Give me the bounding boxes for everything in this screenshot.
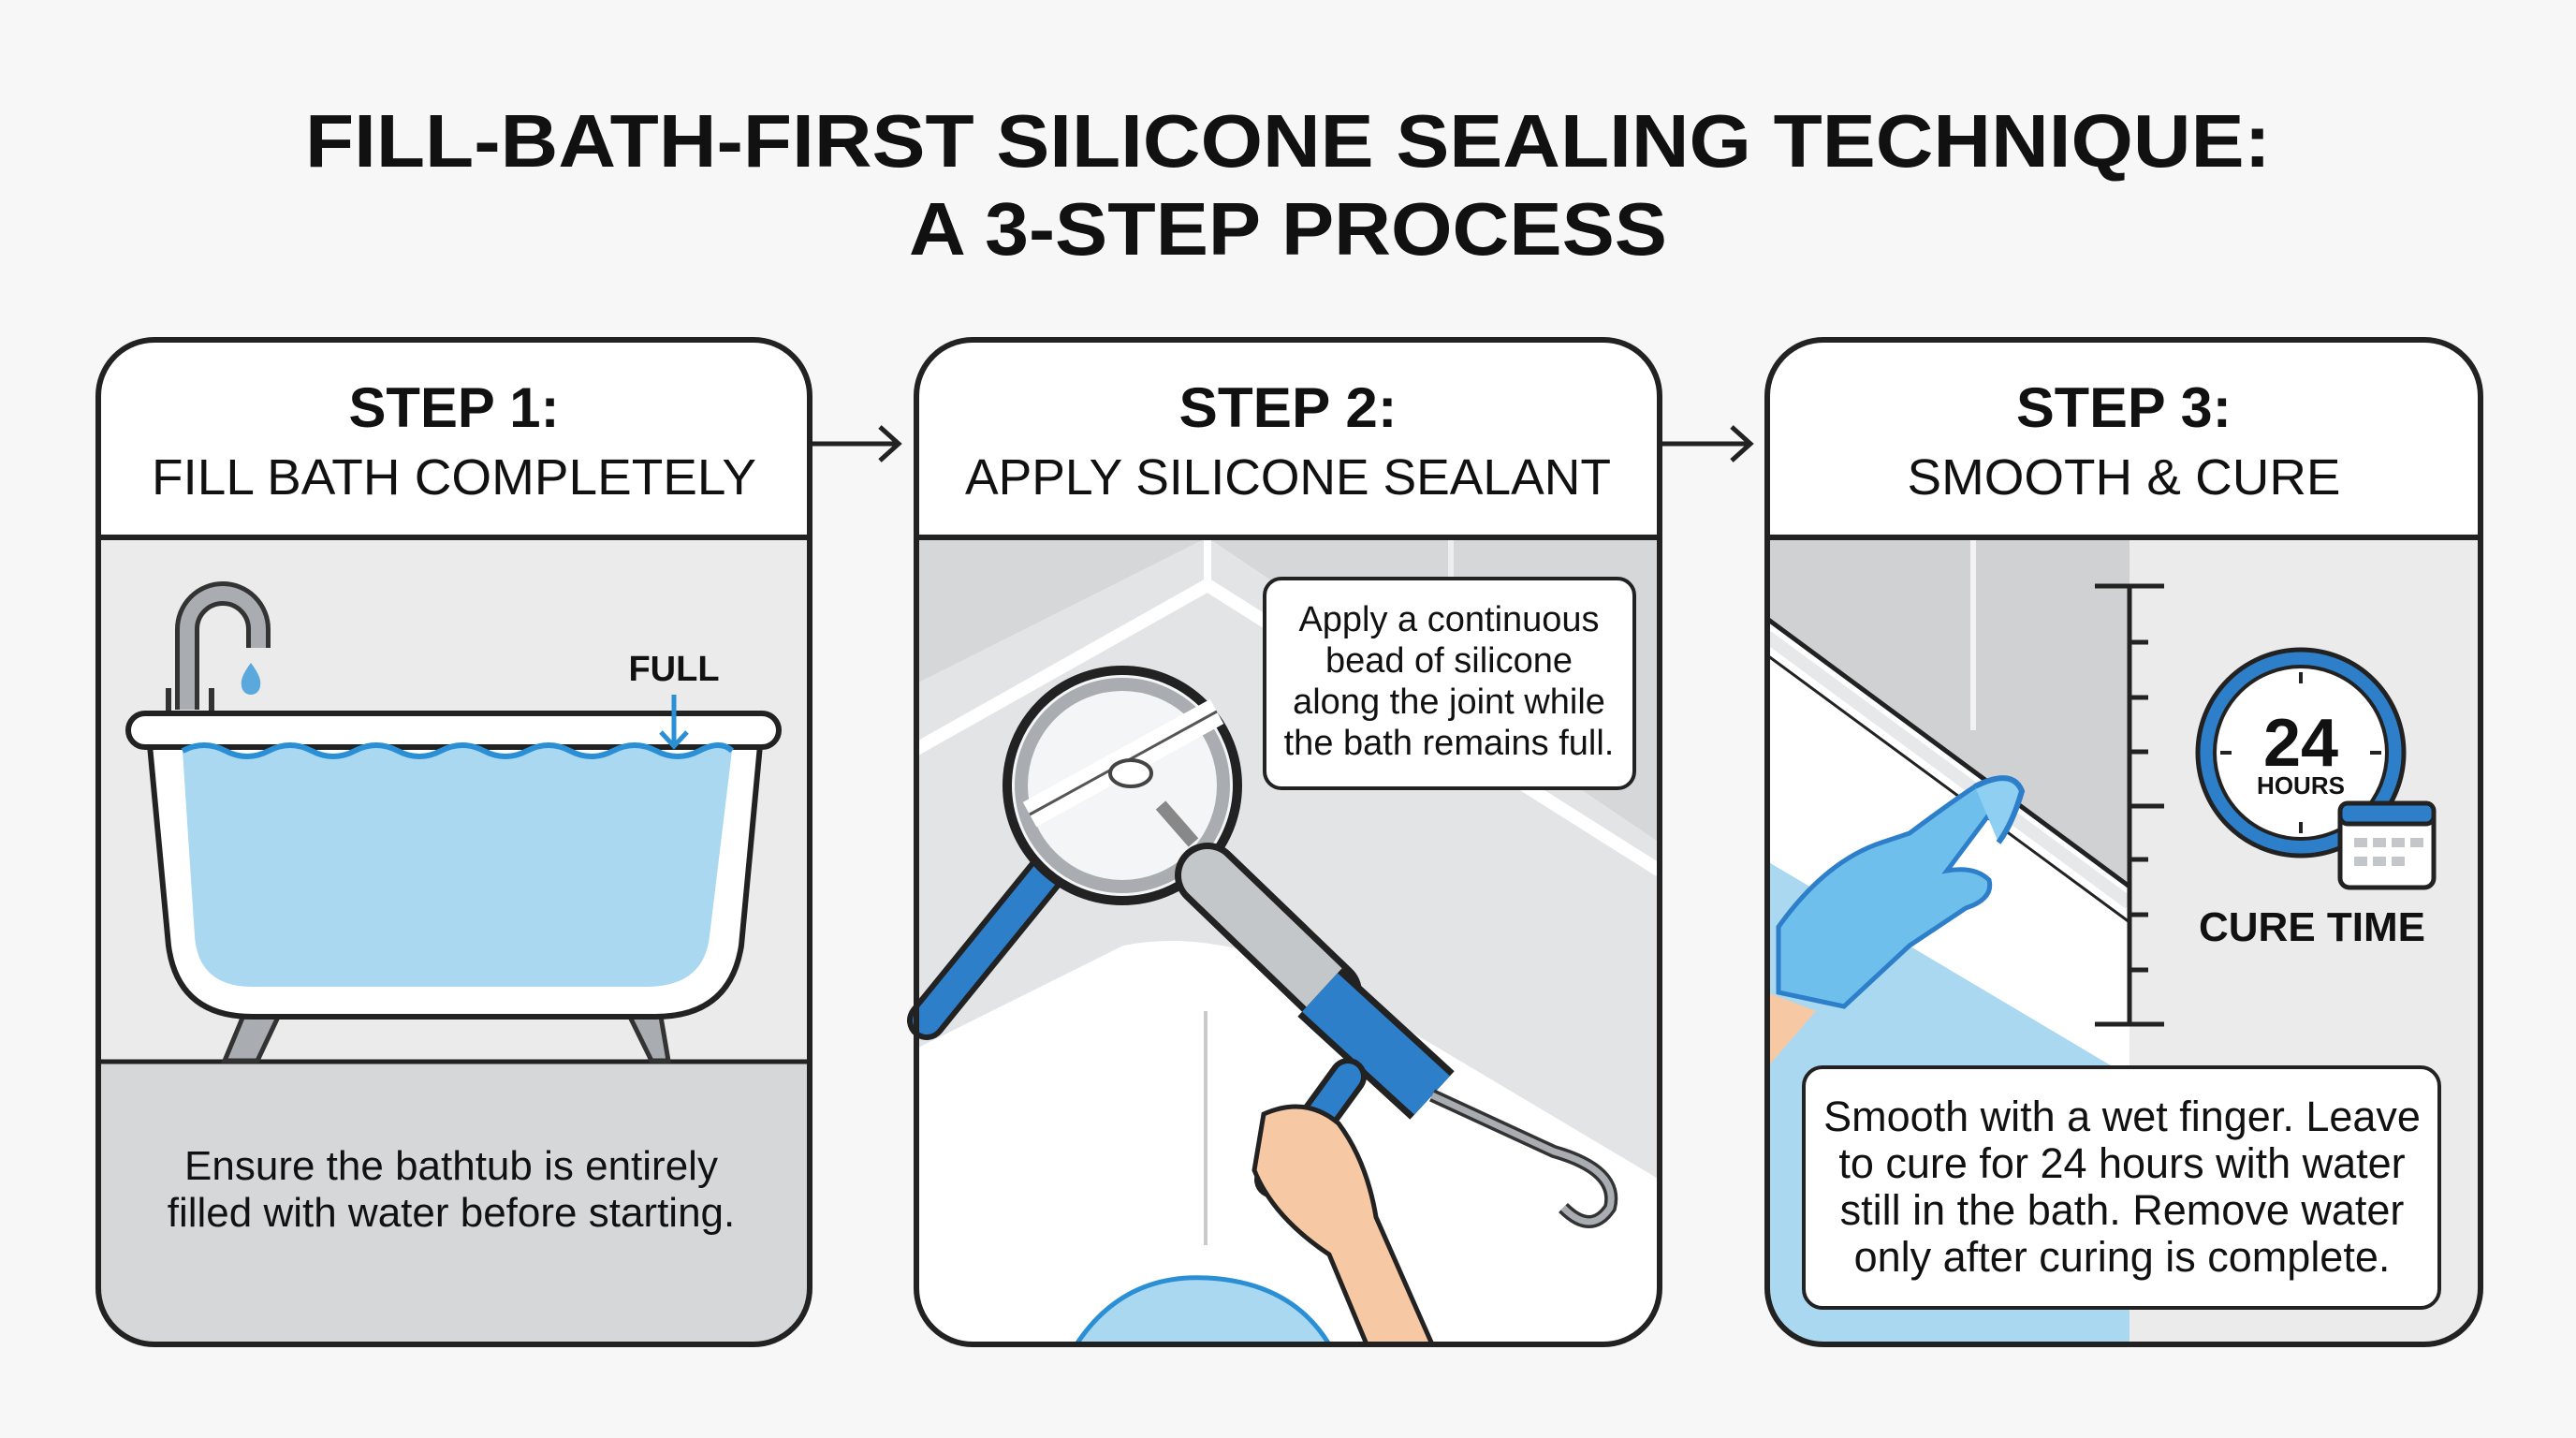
icon: bathtub bbox=[128, 713, 779, 1061]
icon: 24 hours clock: 24 bbox=[2263, 706, 2338, 781]
label: FULL bbox=[628, 650, 720, 746]
heading: step 2: APPLY SILICONE SEALANT bbox=[965, 449, 1611, 506]
heading: step 2: STEP 2: bbox=[1179, 376, 1397, 439]
title: FILL-BATH-FIRST SILICONE SEALING TECHNIQUE: bbox=[305, 99, 2271, 183]
heading: step 1: FILL BATH COMPLETELY bbox=[152, 449, 756, 506]
label: FULL: FULL bbox=[628, 650, 720, 689]
panel: step 2 bbox=[916, 340, 1660, 1344]
callout: step 3: still in the bath. Remove water bbox=[1840, 1186, 2404, 1234]
title: A 3-STEP PROCESS bbox=[909, 187, 1667, 271]
icon: magnifier bbox=[927, 670, 1237, 1020]
icon: calendar bbox=[2340, 803, 2434, 888]
heading: step 1: STEP 1: bbox=[348, 376, 560, 439]
callout: step 3: only after curing is complete. bbox=[1854, 1233, 2390, 1281]
callout: step 2: along the joint while bbox=[1293, 682, 1605, 722]
icon: caulk gun bbox=[1161, 805, 1611, 1222]
arrow: step 1 to 2 bbox=[812, 427, 899, 461]
callout: step 2: the bath remains full. bbox=[1284, 724, 1614, 763]
heading: step 1 bbox=[152, 376, 756, 506]
heading: step 3: STEP 3: bbox=[2016, 376, 2232, 439]
callout: step 2: Apply a continuous bbox=[1298, 600, 1600, 639]
icon: gloved hand bbox=[1778, 778, 2022, 1006]
caption: step 1: filled with water before starting. bbox=[168, 1190, 735, 1236]
panel: step 1 bbox=[98, 340, 810, 1344]
callout: step 3: to cure for 24 hours with water bbox=[1838, 1139, 2406, 1187]
heading: step 3: SMOOTH & CURE bbox=[1908, 449, 2340, 506]
callout: step 2 bbox=[1265, 579, 1634, 788]
label: cure time: CURE TIME bbox=[2199, 904, 2425, 950]
arrow: step 2 to 3 bbox=[1661, 427, 1750, 461]
heading: step 3 bbox=[1908, 376, 2340, 506]
icon: 24 hours clock: HOURS bbox=[2257, 771, 2345, 800]
icon: hand bbox=[1254, 1107, 1432, 1344]
caption: step 1 bbox=[168, 1143, 735, 1236]
callout: step 3 bbox=[1804, 1067, 2439, 1308]
ruler bbox=[2095, 586, 2164, 1024]
callout: step 2: bead of silicone bbox=[1325, 641, 1573, 681]
caption: step 1: Ensure the bathtub is entirely bbox=[184, 1143, 718, 1189]
heading: step 2 bbox=[965, 376, 1611, 506]
title bbox=[305, 99, 2271, 271]
panel: step 3 bbox=[1767, 340, 2481, 1344]
icon: faucet bbox=[168, 594, 260, 712]
callout: step 3: Smooth with a wet finger. Leave bbox=[1823, 1093, 2421, 1140]
icon: 24 hours clock bbox=[2198, 650, 2404, 856]
